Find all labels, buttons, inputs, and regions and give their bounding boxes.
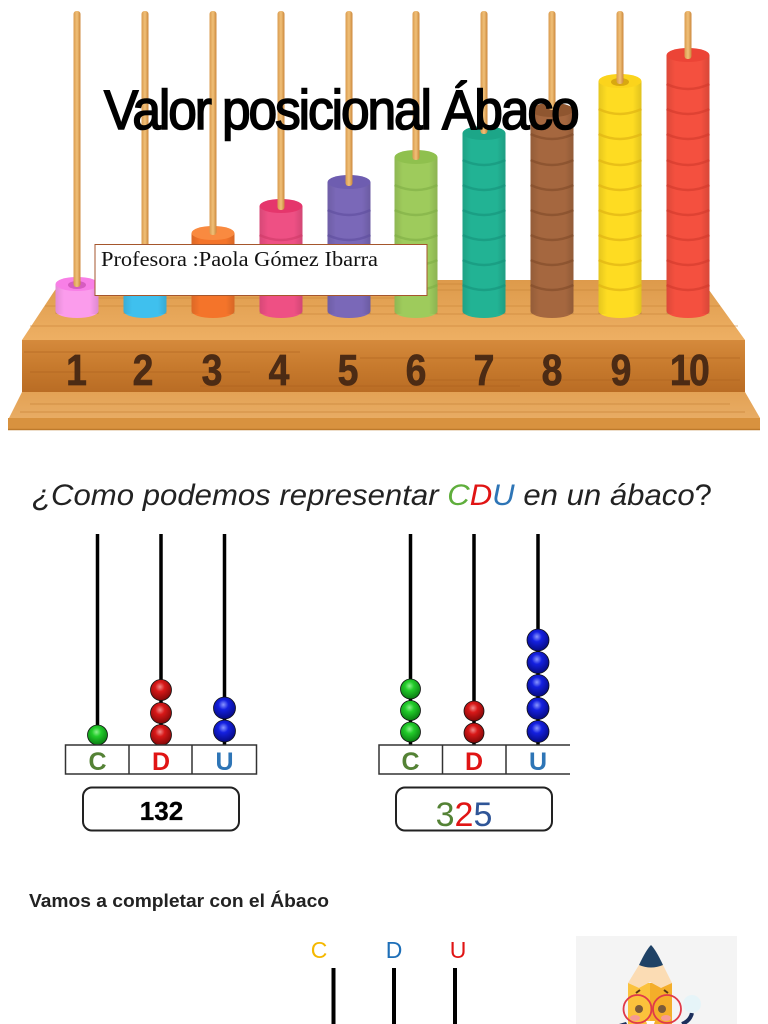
illustration: wooden abacus — [8, 11, 760, 430]
base numerals 1 to 10: 10 — [670, 345, 709, 395]
place value table: U — [215, 748, 234, 776]
place value table: D — [152, 748, 170, 776]
rods — [98, 534, 224, 745]
rod 5 with purple beads — [328, 11, 370, 318]
author box — [95, 244, 427, 296]
abacus example: 325 — [379, 534, 570, 834]
place value table: D — [465, 748, 483, 776]
rods — [334, 968, 455, 1024]
base numerals 1 to 10: 9 — [611, 345, 631, 395]
rod 1 with pink bead — [56, 11, 98, 318]
column letters — [311, 937, 466, 963]
author box: Profesora :Paola Gómez Ibarra — [101, 247, 379, 271]
base numerals 1 to 10: 6 — [406, 345, 426, 395]
rod 6 with green beads — [394, 11, 438, 318]
cheeks — [630, 1015, 671, 1021]
activity heading: Vamos a completar con el Ábaco — [29, 890, 329, 911]
base numerals 1 to 10: 5 — [338, 345, 358, 395]
base numerals 1 to 10: 3 — [202, 345, 222, 395]
rod 9 with yellow beads — [598, 11, 642, 318]
result box 132: 132 — [140, 796, 183, 826]
abacus example: 132 — [66, 534, 256, 830]
base numerals 1 to 10: 2 — [133, 345, 153, 395]
rod 3 with orange beads — [192, 11, 234, 318]
base numerals 1 to 10: 1 — [66, 345, 87, 395]
result box 325: 325 — [436, 796, 492, 834]
column letters: D — [386, 937, 402, 963]
column letters: C — [311, 937, 327, 963]
place value table: U — [529, 748, 547, 776]
place value table — [66, 745, 256, 776]
title: Valor posicional Ábaco — [104, 79, 580, 141]
rod 8 with brown beads — [530, 11, 574, 318]
base numerals 1 to 10: 7 — [474, 345, 494, 395]
pencil body — [628, 983, 672, 1024]
pencil wood — [628, 965, 672, 988]
rod 2 with blue bead — [124, 11, 166, 318]
result box 132 — [83, 788, 239, 830]
place value table: C — [88, 748, 107, 776]
column letters: U — [450, 937, 466, 963]
base numerals 1 to 10: 4 — [269, 345, 290, 395]
raised hand and arm — [619, 995, 701, 1024]
place value table: C — [401, 748, 420, 776]
base numerals 1 to 10 — [66, 345, 709, 395]
eyebrows — [636, 990, 668, 993]
rod 7 with teal beads — [462, 11, 506, 318]
eyes — [635, 1005, 666, 1013]
rods — [410, 534, 538, 745]
rod 10 with red beads — [666, 11, 710, 318]
section heading: ¿Como podemos representar CDU en un ábaco? — [32, 479, 712, 512]
beads: 3 hundreds, 2 tens, 5 units — [400, 629, 549, 743]
illustration: pencil character — [576, 936, 737, 1024]
place value table — [379, 745, 570, 776]
beads: 1 hundred, 3 tens, 2 units — [88, 680, 236, 746]
mouth — [646, 1021, 655, 1024]
glasses — [624, 995, 681, 1023]
blank abacus — [311, 937, 466, 1024]
base numerals 1 to 10: 8 — [542, 345, 562, 395]
pencil tip — [639, 945, 663, 968]
wooden base — [8, 280, 760, 430]
result box 325 — [396, 788, 552, 834]
rod 4 with pink-red beads — [260, 11, 302, 318]
